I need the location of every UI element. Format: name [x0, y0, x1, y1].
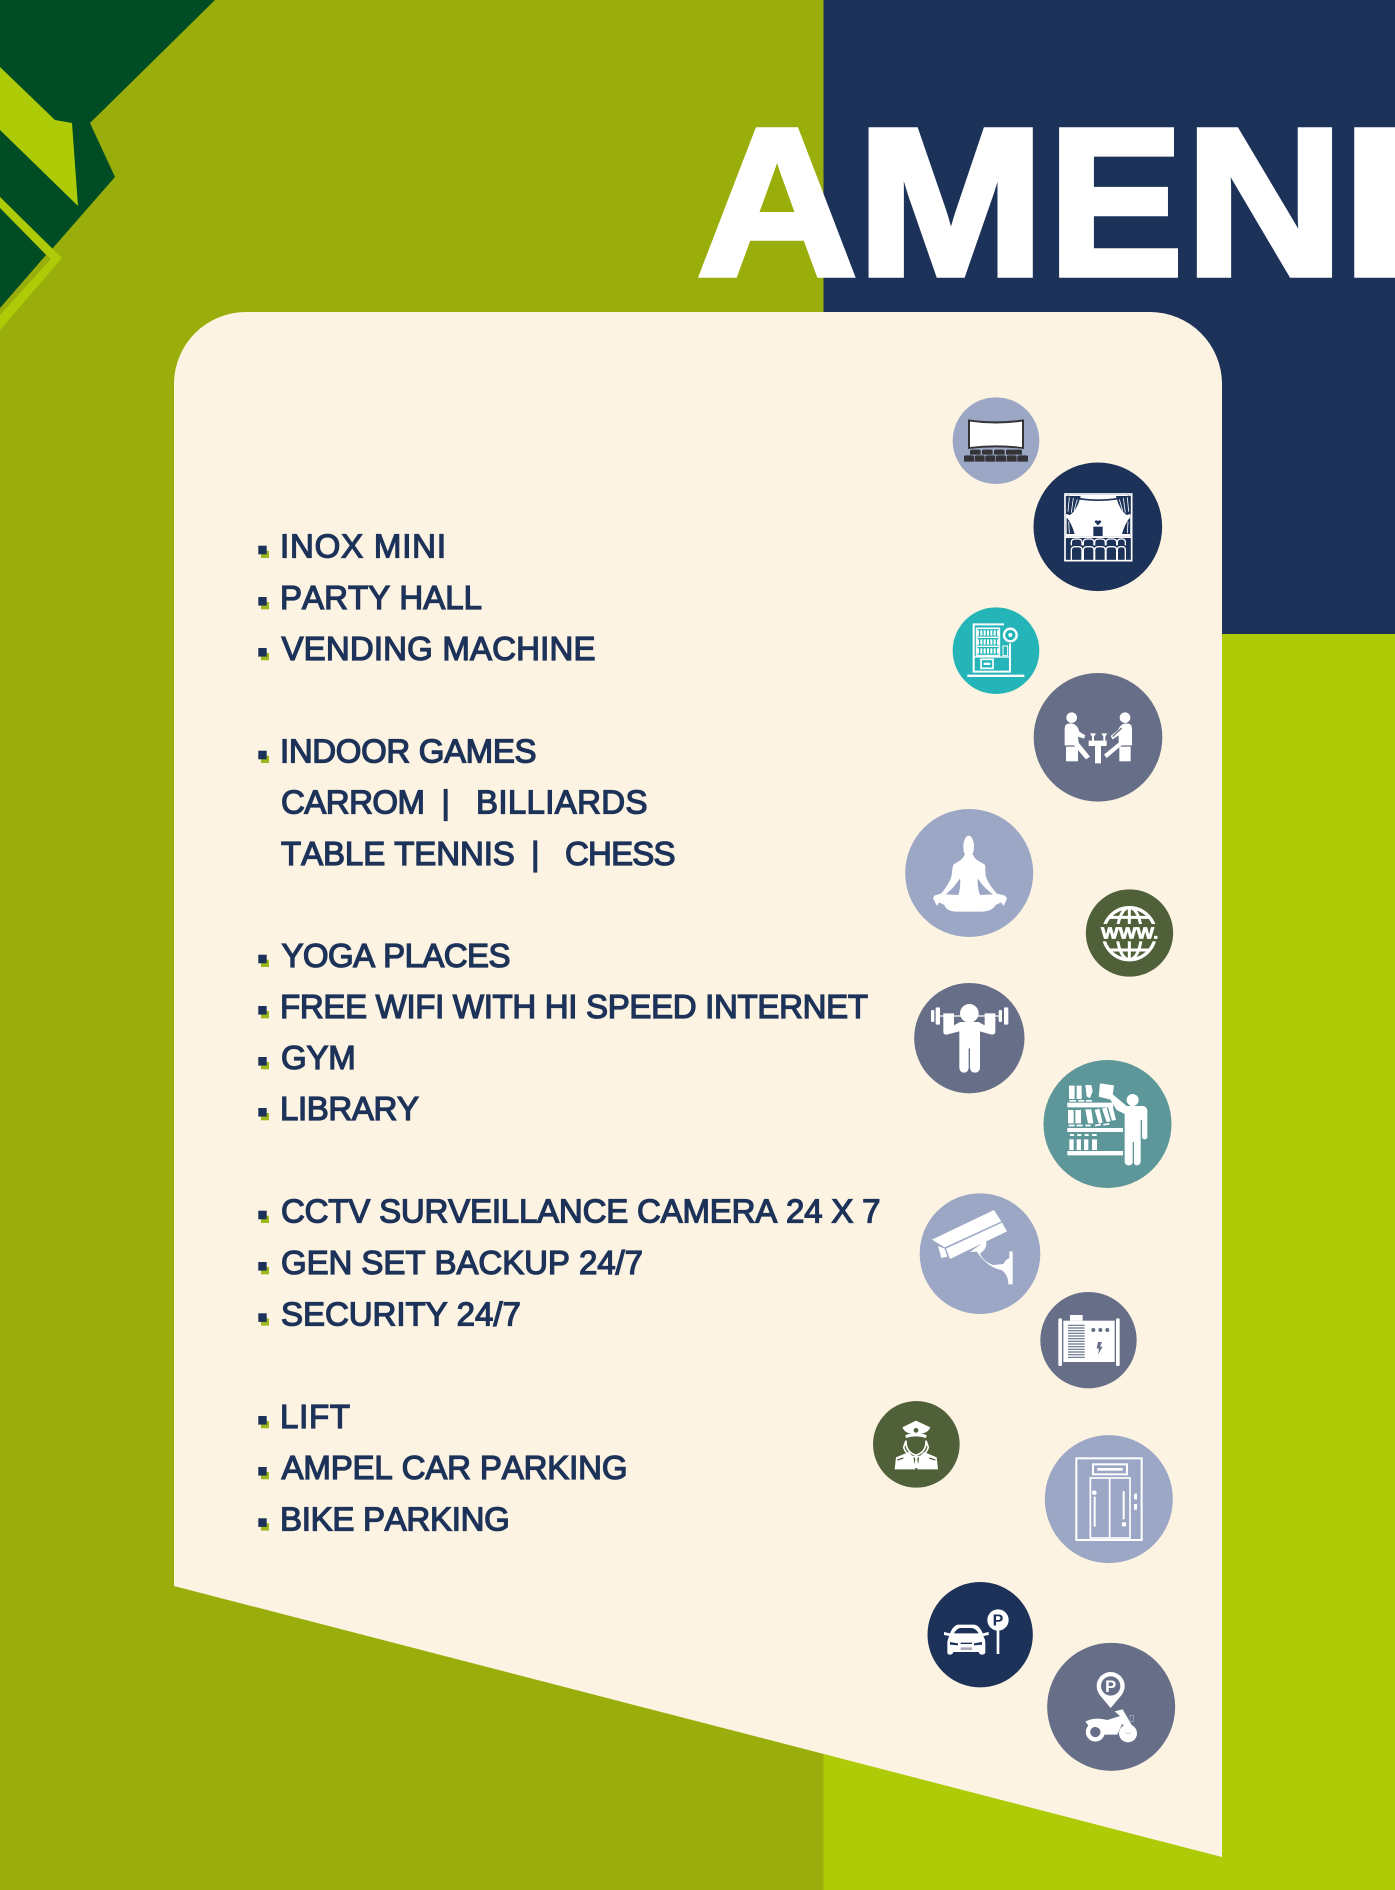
icon: bike parking — [1047, 1643, 1175, 1771]
group: access and parking: AMPEL CAR PARKING — [282, 1449, 628, 1486]
group: indoor games: | — [531, 835, 540, 872]
group: indoor games: TABLE TENNIS — [281, 835, 515, 872]
icon: wifi globe: WWW. — [1101, 926, 1158, 943]
group: wellness and services: YOGA PLACES — [282, 937, 510, 974]
group: indoor games: INDOOR GAMES — [280, 733, 536, 770]
icon: bike parking: P — [1105, 1677, 1116, 1696]
group: indoor games: | — [441, 784, 450, 821]
corner arrow graphic — [0, 0, 215, 330]
icon: generator — [1040, 1292, 1137, 1388]
navy header panel — [824, 0, 1395, 634]
icon: car parking: P — [993, 1613, 1004, 1630]
icon: library — [1043, 1060, 1171, 1188]
group: access and parking: BIKE PARKING — [280, 1500, 510, 1537]
icon: lift — [1045, 1435, 1173, 1563]
content card — [174, 312, 1222, 1857]
group: safety and power — [258, 1193, 880, 1332]
icon: yoga — [905, 809, 1033, 937]
icon: vending machine — [953, 607, 1039, 694]
group: indoor games: CHESS — [565, 835, 676, 872]
group: indoor games — [258, 733, 676, 872]
group: entertainment — [258, 528, 596, 667]
icon: security guard — [873, 1401, 960, 1488]
group: entertainment: INOX MINI — [280, 528, 446, 565]
group: safety and power: CCTV SURVEILLANCE CAMERA 24 X 7 — [281, 1193, 880, 1230]
group: wellness and services: LIBRARY — [280, 1090, 419, 1127]
group: wellness and services — [258, 937, 868, 1127]
icon: car parking — [927, 1582, 1033, 1687]
icon: cctv camera — [920, 1193, 1040, 1314]
icon: cinema screen — [953, 397, 1039, 484]
icon: party hall stage — [1033, 462, 1162, 591]
icon: gym — [914, 983, 1024, 1093]
icon: indoor games players — [1034, 673, 1162, 802]
group: entertainment: VENDING MACHINE — [282, 630, 596, 667]
group: access and parking — [258, 1398, 628, 1537]
title: A — [697, 85, 857, 320]
title: N — [1185, 85, 1344, 320]
icon: wifi globe — [1086, 889, 1173, 977]
group: safety and power: SECURITY 24/7 — [281, 1295, 521, 1332]
group: indoor games: BILLIARDS — [476, 784, 648, 821]
group: safety and power: GEN SET BACKUP 24/7 — [281, 1244, 643, 1281]
title: E — [1048, 85, 1183, 320]
group: access and parking: LIFT — [280, 1398, 350, 1435]
group: indoor games: CARROM — [281, 784, 425, 821]
amenities list — [258, 528, 880, 1537]
group: wellness and services: GYM — [281, 1039, 356, 1076]
group: wellness and services: FREE WIFI WITH HI SPEED INTERNET — [280, 988, 868, 1025]
group: entertainment: PARTY HALL — [280, 579, 482, 616]
title: M — [857, 85, 1045, 320]
